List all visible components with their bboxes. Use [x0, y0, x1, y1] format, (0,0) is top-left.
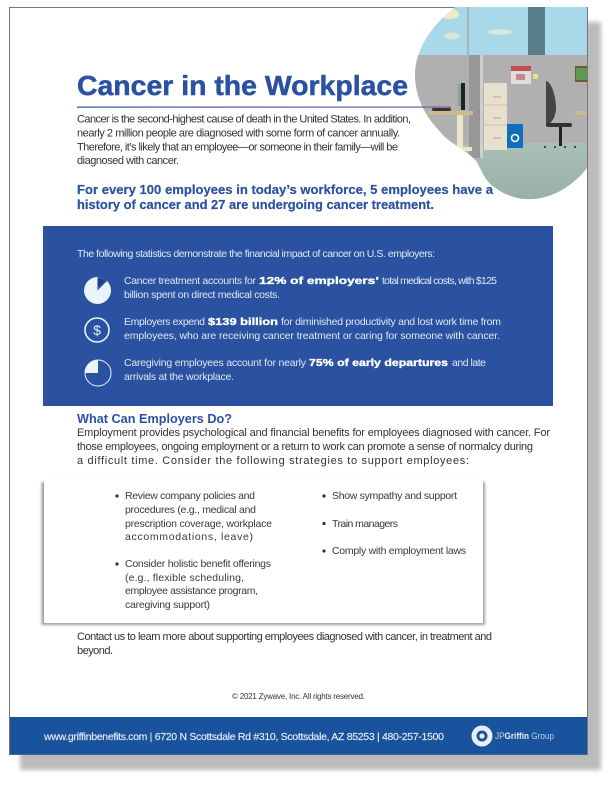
stat: caregiving: [124, 357, 486, 383]
contact text: Contact us to learn more about supporting employees diagnosed with cancer, in treatment and: [77, 631, 492, 643]
strategy: review policies: [115, 490, 272, 543]
employers paragraph: [77, 427, 550, 467]
illustration: office scene: [410, 7, 588, 203]
stat: lost productivity: $139 billion: [208, 316, 278, 328]
logo wordmark: JPGriffin Group: [495, 731, 554, 741]
logo mark: [472, 726, 492, 746]
intro paragraph: diagnosed with cancer.: [77, 155, 179, 167]
panel intro text: The following statistics demonstrate the financial impact of cancer on U.S. employers:: [77, 248, 435, 260]
employers paragraph: a difficult time. Consider the following strategies to support employees:: [77, 455, 469, 467]
stat: lost productivity: employees, who are receiving cancer treatment or caring for someone with cancer.: [124, 330, 500, 342]
contact text: [77, 631, 492, 657]
strategy: holistic benefits: [115, 558, 271, 611]
title rule: [77, 106, 451, 108]
stat: caregiving: and late: [452, 357, 486, 369]
strategy: holistic benefits: Consider holistic benefit offerings: [125, 558, 271, 570]
key statistic callout: [77, 182, 494, 212]
icon: dollar coin: [85, 318, 109, 342]
strategy: sympathy: Show sympathy and support: [332, 490, 457, 502]
stat: lost productivity: Employers expend: [124, 316, 205, 328]
panel: financial impact: [43, 226, 553, 406]
stat: caregiving: 75% of early departures: [309, 357, 448, 369]
stat: medical costs: 12% of employers’: [259, 275, 379, 287]
stat: medical costs: billion spent on direct medical costs.: [124, 289, 280, 301]
stat: caregiving: Caregiving employees account for nearly: [124, 357, 307, 369]
intro paragraph: nearly 2 million people are diagnosed with some form of cancer annually.: [77, 128, 400, 140]
intro paragraph: Therefore, it’s likely that an employee—or someone in their family—will be: [77, 142, 398, 154]
intro paragraph: Cancer is the second-highest cause of death in the United States. In addition,: [77, 114, 411, 126]
key statistic callout: history of cancer and 27 are undergoing cancer treatment.: [77, 197, 434, 212]
icon: pie chart 25%: [85, 360, 111, 386]
strategy: train managers: Train managers: [332, 518, 398, 530]
strategy: review policies: procedures (e.g., medical and: [125, 504, 256, 516]
key statistic callout: For every 100 employees in today’s workforce, 5 employees have a: [77, 182, 494, 197]
strategy: holistic benefits: employee assistance program,: [125, 585, 258, 597]
strategy: review policies: prescription coverage, workplace: [125, 518, 272, 530]
stat: lost productivity: for diminished productivity and lost work time from: [281, 316, 501, 328]
footer contact details: www.griffinbenefits.com | 6720 N Scottsdale Rd #310, Scottsdale, AZ 85253 | 480-257-1500: [43, 731, 444, 743]
stat: medical costs: [124, 275, 497, 301]
strategy: employment laws: Comply with employment laws: [332, 545, 466, 557]
panel: strategies card: [44, 480, 483, 623]
stat: medical costs: total medical costs, with $125: [382, 275, 497, 287]
strategies card shadow: [42, 482, 485, 625]
intro paragraph: [77, 114, 411, 167]
heading: What Can Employers Do?: What Can Employers Do?: [77, 411, 232, 426]
strategy: holistic benefits: caregiving support): [125, 599, 210, 611]
icon: dollar coin: $: [93, 322, 101, 338]
copyright: © 2021 Zywave, Inc. All rights reserved.: [232, 692, 365, 701]
stat: lost productivity: [124, 316, 501, 342]
strategy: review policies: Review company policies and: [125, 490, 255, 502]
footer bar: [10, 717, 587, 754]
contact text: beyond.: [77, 645, 113, 657]
employers paragraph: those employees, ongoing employment or a return to work can promote a sense of normalcy during: [77, 441, 533, 453]
stat: medical costs: Cancer treatment accounts for: [124, 275, 256, 287]
icon: pie chart 12%: [84, 277, 111, 304]
strategy: holistic benefits: (e.g., flexible scheduling,: [125, 572, 244, 584]
stat: caregiving: arrivals at the workplace.: [124, 371, 234, 383]
employers paragraph: Employment provides psychological and financial benefits for employees diagnosed with cancer. For: [77, 427, 550, 439]
strategy: review policies: accommodations, leave): [125, 531, 253, 543]
title: Cancer in the Workplace: [77, 70, 408, 101]
